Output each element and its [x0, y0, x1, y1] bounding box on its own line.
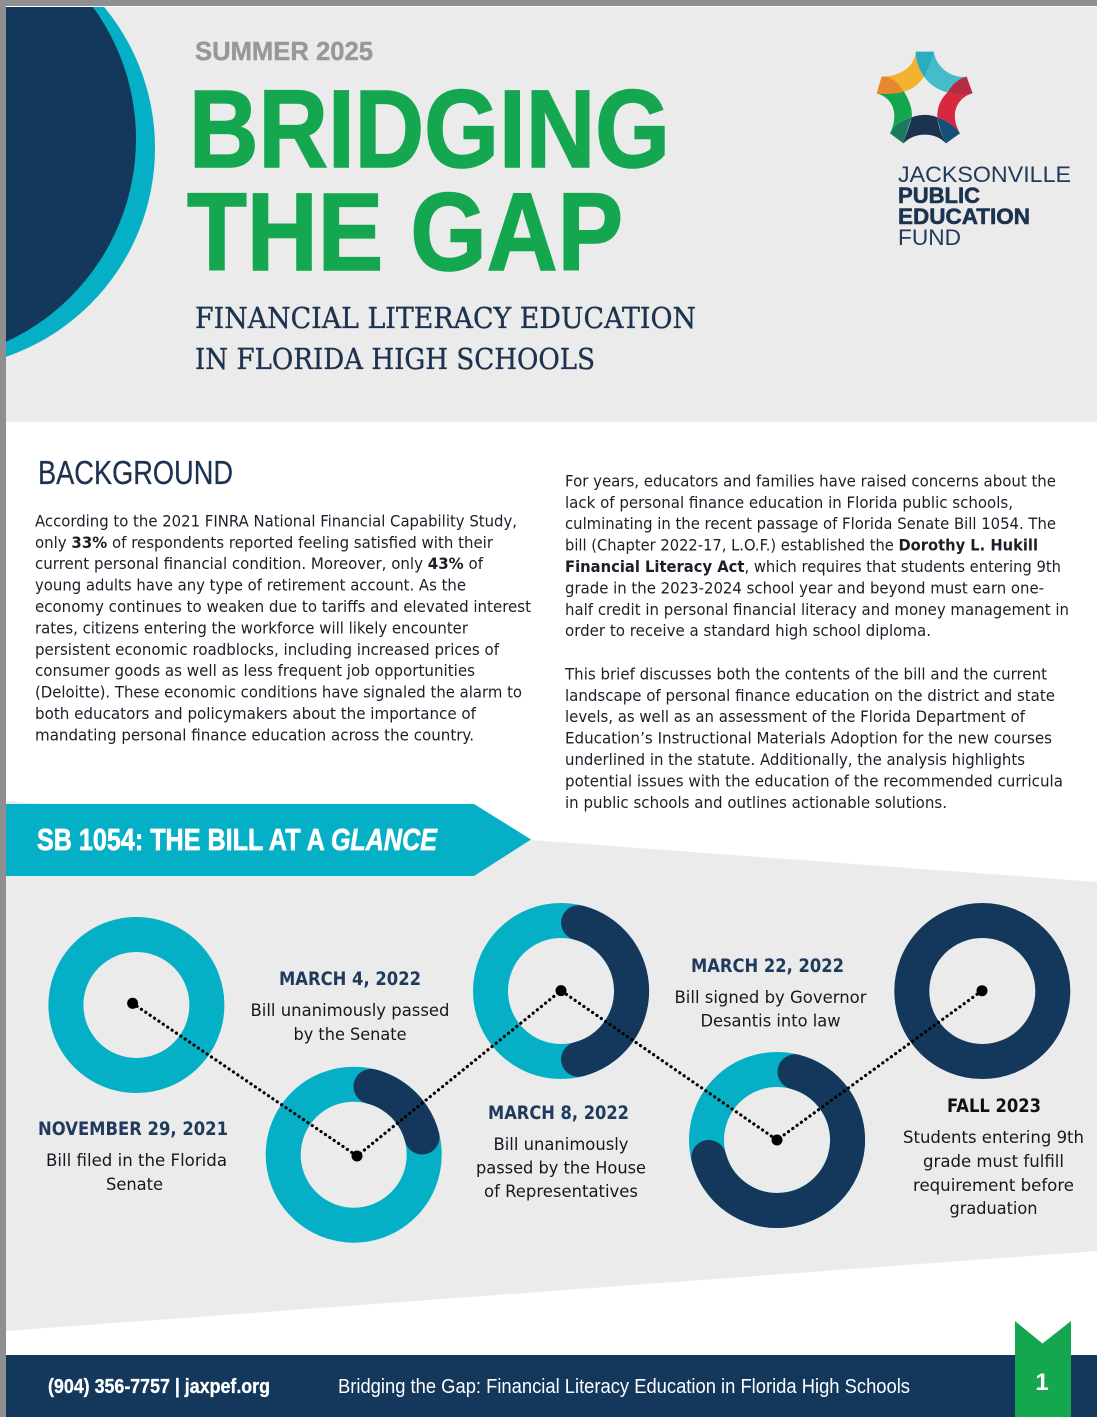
milestone: November 29, 2021: Senate	[106, 1175, 163, 1195]
donut: Fall 2023	[912, 920, 1053, 1062]
text block: right column first paragraph: bill (Chapter 2022-17, L.O.F.) established the Dorothy L. Hukill	[565, 536, 1038, 555]
title: THE GAP	[187, 171, 623, 294]
donut: March 22 2022	[706, 1070, 848, 1210]
text block: right column first paragraph: order to receive a standard high school diploma.	[565, 621, 931, 640]
milestone: Fall 2023: requirement before	[913, 1176, 1074, 1196]
text block: right column first paragraph	[565, 471, 1069, 640]
text block: right column first paragraph: culminating in the recent passage of Florida Senate Bill 1054. The	[565, 514, 1056, 533]
text block: background left column: persistent economic roadblocks, including increased prices of	[35, 640, 499, 659]
heading: background: BACKGROUND	[38, 454, 233, 491]
panel: header	[0, 0, 1097, 422]
milestone: March 22, 2022: Bill signed by Governor	[674, 988, 867, 1008]
footer contact: (904) 356-7757 | jaxpef.org	[48, 1376, 270, 1398]
text block: right column first paragraph: For years, educators and families have raised concerns about the	[565, 471, 1056, 490]
milestone: March 22, 2022: MARCH 22, 2022	[691, 956, 844, 977]
banner: the bill at a glance: SB 1054: THE BILL AT A GLANCE	[37, 822, 438, 857]
logo: Jacksonville Public Education Fund	[877, 52, 1071, 250]
milestone: March 8, 2022: of Representatives	[484, 1182, 638, 1202]
page number ribbon	[1015, 1321, 1071, 1417]
footer title: Bridging the Gap: Financial Literacy Education in Florida High Schools	[338, 1376, 910, 1398]
text block: background left column: economy continues to weaken due to tariffs and elevated interest	[35, 597, 531, 616]
milestone: March 4, 2022: MARCH 4, 2022	[279, 969, 421, 990]
text block: right column first paragraph: half credit in personal financial literacy and money management in	[565, 600, 1069, 619]
milestone: November 29, 2021	[38, 1119, 228, 1195]
text block: background left column: young adults have any type of retirement account. As the	[35, 576, 466, 595]
dotted timeline connector	[127, 985, 988, 1162]
subtitle: FINANCIAL LITERACY EDUCATION	[195, 302, 696, 335]
milestone: Fall 2023	[903, 1096, 1084, 1219]
text block: background left column: According to the 2021 FINRA National Financial Capability Study,	[35, 511, 517, 530]
milestone: November 29, 2021: Bill filed in the Florida	[46, 1151, 227, 1171]
logo wordmark: FUND	[898, 225, 961, 250]
text block: right column second paragraph: underlined in the statute. Additionally, the analysis highlights	[565, 750, 1025, 769]
text block: background left column: only 33% of respondents reported feeling satisfied with their	[35, 533, 493, 552]
text block: right column second paragraph: Education’s Instructional Materials Adoption for the new courses	[565, 729, 1052, 748]
text block: right column second paragraph: landscape of personal finance education on the district and state	[565, 686, 1055, 705]
logo wordmark: PUBLIC	[898, 183, 980, 208]
milestone: March 8, 2022: passed by the House	[476, 1158, 646, 1178]
text block: background left column: mandating personal finance education across the country.	[35, 725, 474, 744]
milestone: Fall 2023: FALL 2023	[947, 1096, 1041, 1117]
icon: five-colour star mark	[877, 52, 973, 143]
milestone: March 8, 2022: MARCH 8, 2022	[488, 1103, 629, 1124]
text block: background left column: current personal financial condition. Moreover, only 43% of	[35, 554, 483, 573]
text block: background left column: both educators and policymakers about the importance of	[35, 704, 476, 723]
milestone: Fall 2023: graduation	[950, 1199, 1038, 1219]
panel: timeline	[6, 801, 1097, 1331]
title: BRIDGING	[189, 68, 670, 191]
text block: right column first paragraph: Financial Literacy Act, which requires that students entering 9th	[565, 557, 1061, 576]
logo wordmark: JACKSONVILLE	[898, 162, 1071, 187]
milestone: March 4, 2022: Bill unanimously passed	[250, 1001, 450, 1021]
milestone: March 4, 2022: by the Senate	[294, 1025, 406, 1045]
text block: background left column: rates, citizens entering the workforce will likely encounter	[35, 618, 468, 637]
milestone: March 8, 2022	[476, 1103, 646, 1202]
milestone: March 8, 2022: Bill unanimously	[494, 1135, 628, 1155]
milestone: March 22, 2022	[674, 956, 867, 1032]
text block: right column first paragraph: grade in the 2023-2024 school year and beyond must earn one-	[565, 578, 1044, 597]
text block: right column second paragraph: This brief discusses both the contents of the bill and the current	[564, 664, 1047, 683]
text block: right column second paragraph: in public schools and outlines actionable solutions.	[565, 793, 947, 812]
footer bar	[6, 1321, 1097, 1417]
milestone: March 4, 2022	[250, 969, 450, 1045]
donut: November 2021	[66, 934, 207, 1076]
milestone: March 22, 2022: Desantis into law	[700, 1012, 840, 1032]
subtitle	[195, 302, 696, 376]
subtitle: IN FLORIDA HIGH SCHOOLS	[195, 343, 595, 376]
title	[187, 68, 670, 294]
text block: background left column	[35, 511, 531, 744]
donut: March 8 2022	[490, 920, 632, 1062]
logo wordmark: EDUCATION	[898, 204, 1030, 229]
text block: background left column: (Deloitte). These economic conditions have signaled the alarm to	[35, 683, 522, 702]
page number ribbon: 1	[1035, 1369, 1049, 1396]
text block: background left column: consumer goods as well as less frequent job opportunities	[35, 661, 475, 680]
edition label: SUMMER 2025	[195, 36, 373, 66]
logo wordmark	[898, 162, 1071, 250]
text block: right column first paragraph: lack of personal finance education in Florida public schools,	[565, 493, 1013, 512]
milestone: Fall 2023: Students entering 9th	[903, 1128, 1084, 1148]
text block: right column second paragraph: potential issues with the education of the recommended curricula	[565, 771, 1063, 790]
text block: right column second paragraph: levels, as well as an assessment of the Florida Department of	[565, 707, 1025, 726]
milestone: Fall 2023: grade must fulfill	[923, 1152, 1064, 1172]
text block: right column second paragraph	[564, 664, 1063, 812]
decorative circle: teal and navy arcs	[0, 0, 155, 369]
milestone: November 29, 2021: NOVEMBER 29, 2021	[38, 1119, 228, 1140]
donut: March 4 2022	[283, 1084, 424, 1225]
banner: the bill at a glance	[6, 804, 531, 876]
